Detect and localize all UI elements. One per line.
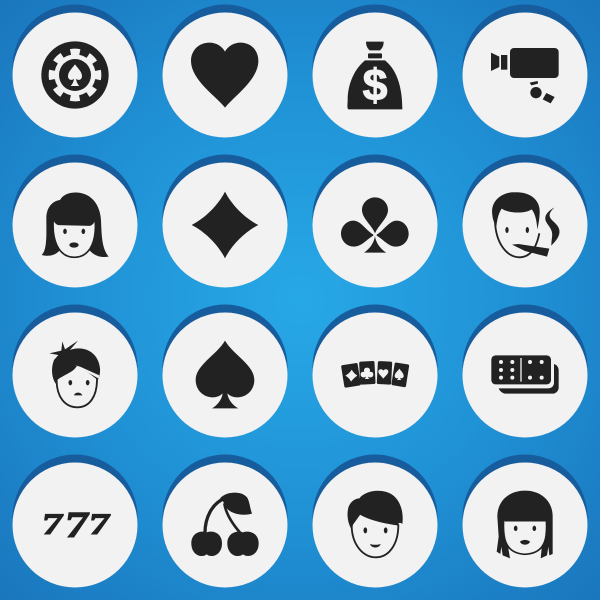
circle: cards [312,304,438,438]
icon: club suit [341,197,409,253]
icon: triple seven: 7 [40,507,65,541]
icon: money bag: $ [363,61,388,110]
icon: diamond suit [192,192,258,258]
circle: woman [12,154,138,288]
icon: boy with spiky hair [49,341,100,407]
icon: heart [191,43,258,108]
icon: spade suit [196,341,254,408]
circle: camera [462,4,588,138]
icon: domino tiles [491,355,559,394]
icon: triple seven [40,505,112,546]
icon: triple seven: 7 [62,505,91,546]
circle: cherry [162,454,288,588]
circle: money bag [312,4,438,138]
icon: cherries [191,493,259,556]
circle: club [312,154,438,288]
icon: woman with bangs [42,193,109,257]
circle: diamond [162,154,288,288]
icon: man smoking cigar [492,192,559,257]
circle: boy [12,304,138,438]
circle: spade [162,304,288,438]
icon: hand of four cards [341,361,409,388]
circle: domino [462,304,588,438]
icon: security camera [491,48,559,103]
circle: 777 [12,454,138,588]
icon: woman with long straight hair [497,491,553,558]
icon: money bag [347,42,402,110]
icon: casino chip [41,41,109,109]
circle: heart [162,4,288,138]
icon: smiling man [348,491,403,557]
icon: triple seven: 7 [87,507,112,541]
circle: smoker [462,154,588,288]
circle: chip [12,4,138,138]
circle: woman with long hair [462,454,588,588]
circle: man [312,454,438,588]
